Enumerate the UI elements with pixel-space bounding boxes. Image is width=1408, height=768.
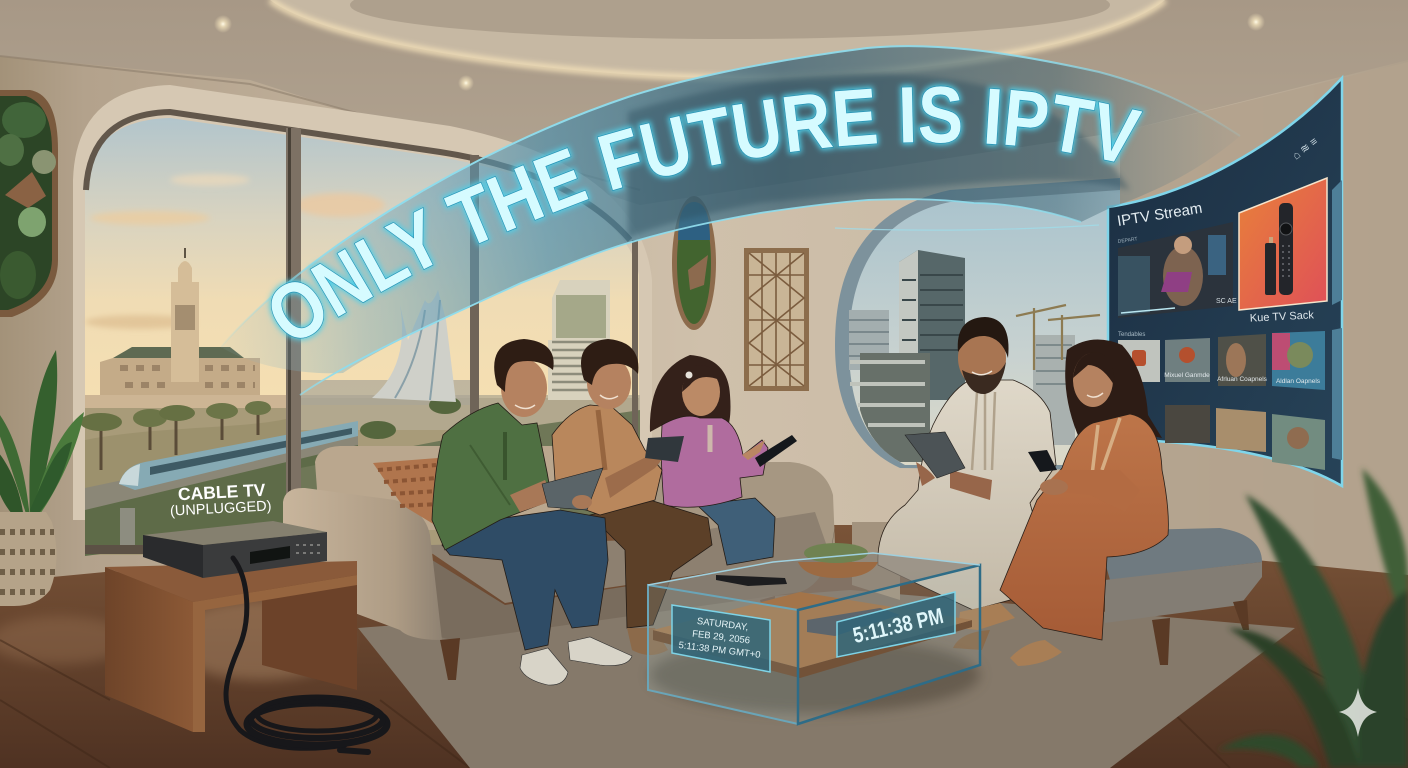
cable box (143, 521, 327, 578)
title: ONLY THE FUTURE IS IPTV (266, 80, 1147, 344)
cable label (170, 480, 272, 520)
face and hair (587, 357, 631, 409)
robe (878, 380, 1056, 610)
elevated rail bridge (85, 430, 358, 510)
terrace building (850, 353, 930, 462)
tall glass tower (899, 250, 965, 400)
brown trousers (590, 500, 712, 628)
date hologram panel: 5:11:38 PM GMT+0 (678, 640, 761, 661)
channel row: Mixuel Ganmde (1164, 372, 1210, 379)
palm trees (80, 396, 461, 470)
face (1073, 353, 1113, 407)
cable label: (UNPLUGGED) (170, 498, 272, 520)
person: boy in tan shirt (552, 339, 712, 655)
smartphone (755, 435, 797, 467)
sofa seat and base (430, 512, 830, 603)
time hologram panel (837, 592, 955, 657)
green sweater (432, 403, 552, 550)
city ground (85, 380, 640, 556)
channel row: Afrluan Coapnels (1217, 376, 1268, 383)
date hologram panel: SATURDAY, (696, 616, 749, 633)
sail-shaped landmark (372, 290, 456, 402)
patterned cushion (373, 458, 440, 528)
vertical garden wall panel (0, 90, 58, 317)
sparkle watermark (1339, 688, 1377, 737)
side table (105, 561, 357, 732)
jeans (697, 498, 775, 565)
right chaise seat (852, 522, 1262, 665)
arm and hands (1040, 470, 1140, 512)
face (682, 368, 720, 416)
hands and tablet (916, 462, 992, 500)
person: mother in orange dress (953, 340, 1168, 666)
hands and tablet (510, 480, 555, 512)
long hair (1065, 340, 1162, 440)
person: boy in green sweater (432, 339, 632, 685)
curved IPTV streaming screen (1108, 78, 1342, 486)
curved IPTV streaming screen: Tendables (1118, 332, 1145, 338)
card caption: Kue TV Sack (1250, 309, 1315, 325)
floating holographic ribbon (221, 46, 1240, 395)
pointing hand (742, 440, 765, 460)
sofa arm (283, 488, 442, 640)
curved IPTV streaming screen: DEPART (1117, 236, 1138, 245)
cable label: CABLE TV (177, 480, 266, 504)
clouds (85, 174, 385, 329)
potted plant left (0, 350, 84, 606)
face and hair (501, 359, 547, 417)
lower channel row (1165, 405, 1325, 470)
sofa back (315, 446, 560, 530)
mosque and minaret (85, 248, 300, 408)
wooden lower shelf (653, 620, 972, 678)
distant buildings (849, 310, 889, 370)
carved wooden lattice wall art (744, 248, 809, 391)
shoes (520, 648, 568, 685)
status icons: ⌂ ≋ ≡ (1290, 135, 1320, 162)
left sofa (283, 446, 835, 680)
area rug (358, 590, 1295, 768)
date hologram panel (672, 605, 770, 672)
train on elevated rail (119, 421, 358, 490)
long hair (650, 355, 730, 432)
person: girl in pink top (650, 355, 797, 565)
glass panels (648, 585, 798, 724)
title: ONLY THE FUTURE IS IPTV (270, 86, 1144, 338)
date hologram panel: FEB 29, 2056 (692, 629, 751, 647)
smartphone (1028, 450, 1057, 472)
channel row (1118, 331, 1325, 390)
fruit bowl (798, 562, 878, 578)
right porthole window (835, 178, 1120, 470)
time hologram panel: 5:11:38 PM (850, 603, 946, 648)
sofa legs (440, 596, 775, 680)
wall planter oval (672, 196, 716, 330)
pink top (661, 416, 768, 507)
construction tower and cranes (1016, 305, 1100, 445)
left window with city view (73, 85, 652, 582)
coiled black cable (226, 558, 387, 752)
jeans (442, 510, 608, 650)
screen heading: IPTV Stream (1116, 200, 1203, 230)
side card sliver (1332, 180, 1342, 460)
shoe (627, 628, 668, 655)
foreground blurred plant (1218, 468, 1408, 768)
stacked books (807, 608, 900, 636)
tan shirt (552, 405, 662, 515)
person: father in white robe (878, 317, 1056, 610)
face and beard (958, 328, 1006, 388)
channel row: Aldlan Oapnels (1276, 378, 1321, 385)
orange dress (1000, 414, 1168, 640)
glass coffee table (648, 543, 980, 724)
hands and tablet (605, 445, 670, 498)
white modern tower (548, 280, 610, 400)
featured video: SC AE (1216, 298, 1237, 305)
floor (0, 525, 1408, 768)
ceiling recess with cove light (214, 0, 1265, 120)
featured video (1118, 222, 1237, 318)
window frame and mullions (85, 112, 638, 554)
Fire TV stick promo card (1239, 178, 1327, 310)
remote control (716, 575, 787, 586)
shoes (958, 603, 1015, 630)
